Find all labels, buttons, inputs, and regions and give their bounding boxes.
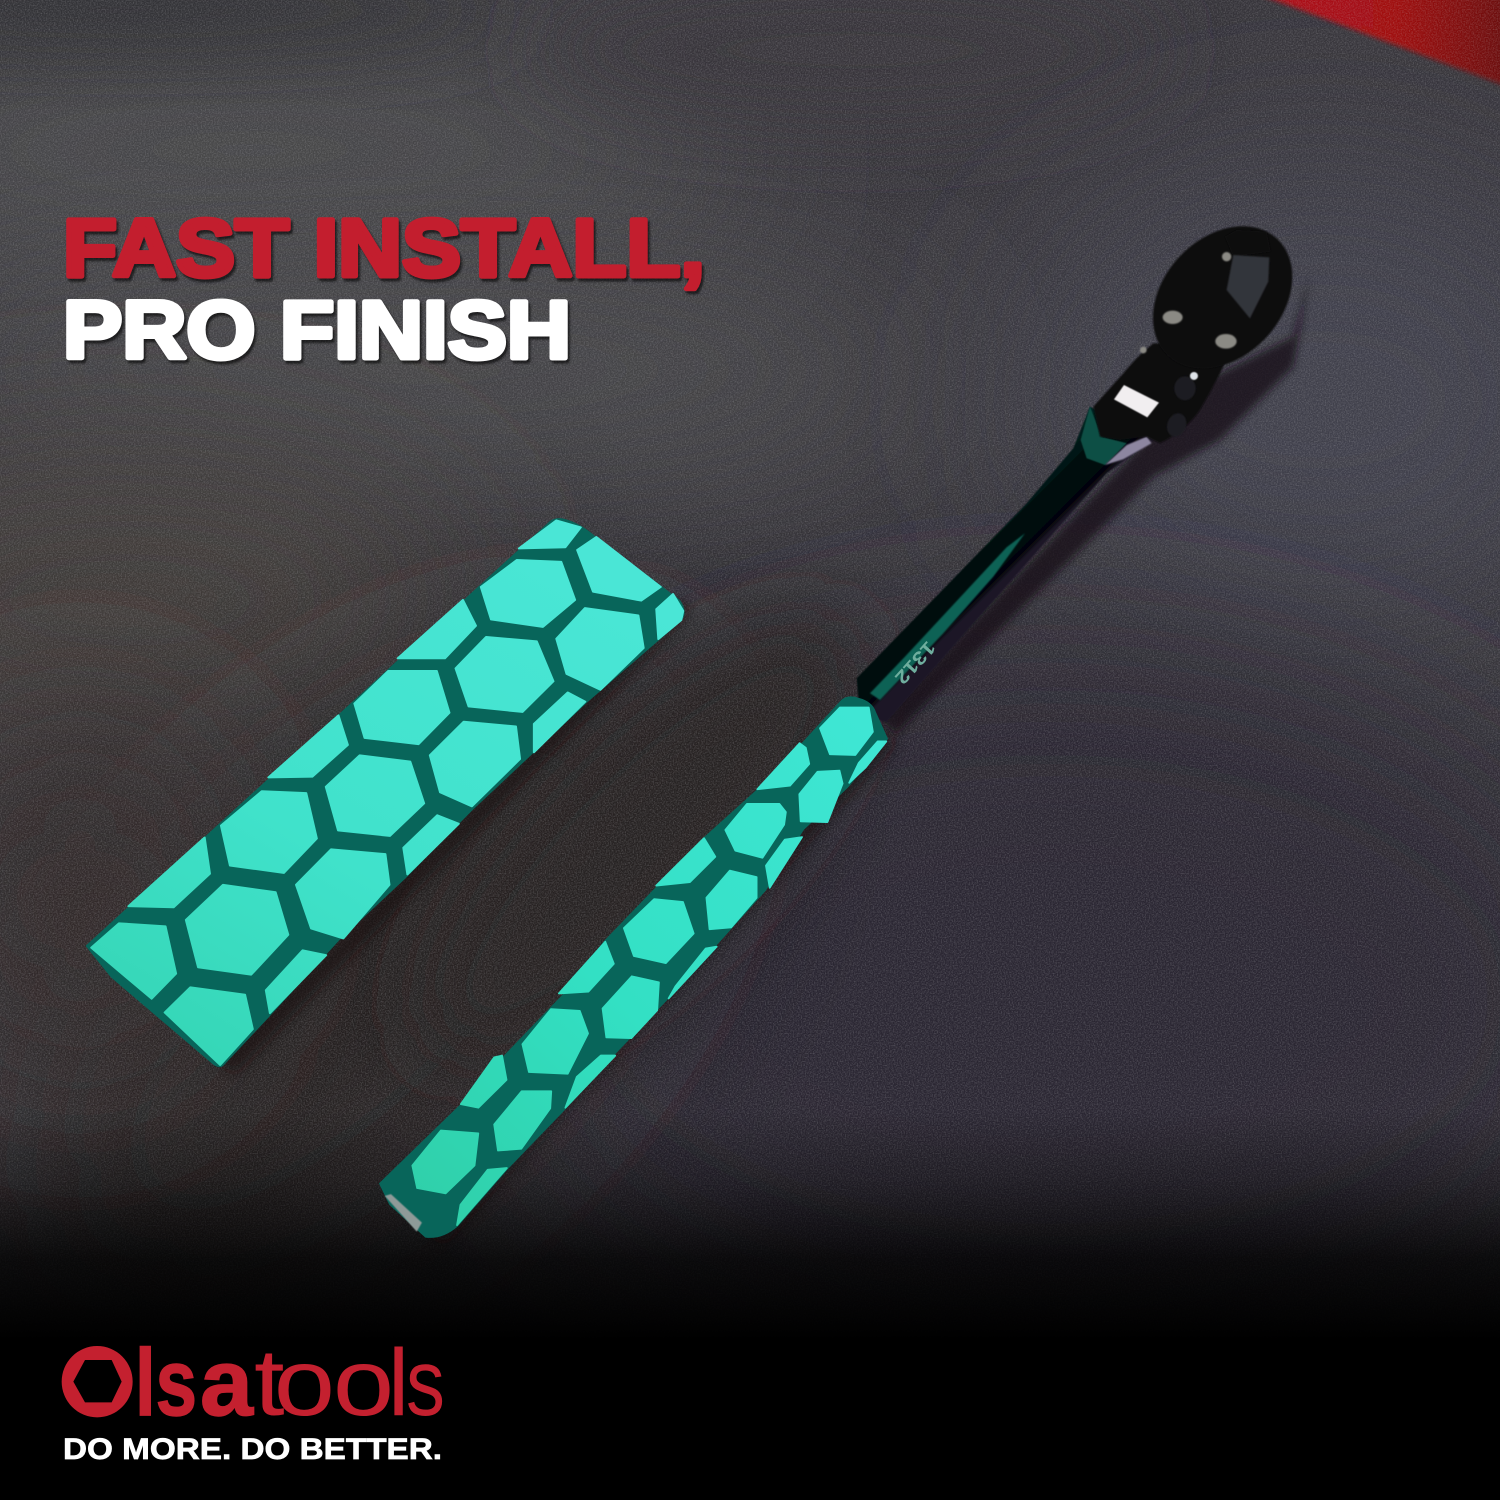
installed grip sleeve on ratchet handle: [379, 696, 888, 1238]
ratchet shaft: [857, 407, 1153, 722]
selector window highlight: [1114, 385, 1159, 417]
brand logo: [62, 1329, 445, 1466]
engraved size mark: 1312: [891, 637, 940, 688]
ratchet soft shadow: [880, 273, 1310, 733]
ratchet head: [1125, 198, 1321, 396]
shaft teal reflection: [870, 533, 1025, 700]
rivets: [1140, 252, 1237, 353]
title: [63, 203, 705, 376]
handle socket end: [385, 1194, 422, 1232]
installed sleeve hexagon cells: [412, 707, 886, 1225]
ratchet neck: [1093, 343, 1233, 443]
logo wordmark bold l and s: ls: [135, 1330, 197, 1436]
ratchet wrench: [857, 198, 1321, 733]
title line two: PRO FINISH: [63, 285, 571, 376]
contact shadows under sleeves: [215, 600, 895, 1243]
logo wordmark light s: s: [406, 1330, 445, 1436]
neck chrome highlight: [1105, 437, 1152, 465]
title line one: FAST INSTALL,: [63, 203, 705, 294]
neck reflection: [1081, 407, 1127, 465]
installed sleeve base: [379, 696, 888, 1238]
logo wordmark light too: too: [254, 1329, 394, 1435]
background: bottom black fade: [0, 1110, 1500, 1500]
background: red toolbox corner: [1258, 0, 1500, 86]
neck side parts: [1164, 376, 1196, 439]
flat sleeve hexagon cells: [91, 520, 683, 1065]
flat hexagon grip sleeve: [86, 518, 685, 1067]
logo wordmark bold a: a: [200, 1330, 254, 1436]
logo icon: hex nut letter O: [62, 1346, 133, 1417]
logo wordmark light l: l: [388, 1330, 409, 1436]
square drive: [1225, 230, 1271, 257]
side screw: [1190, 372, 1198, 380]
tagline: DO MORE. DO BETTER.: [63, 1433, 442, 1466]
drive face: [1227, 255, 1269, 318]
flat sleeve base: [86, 518, 685, 1067]
